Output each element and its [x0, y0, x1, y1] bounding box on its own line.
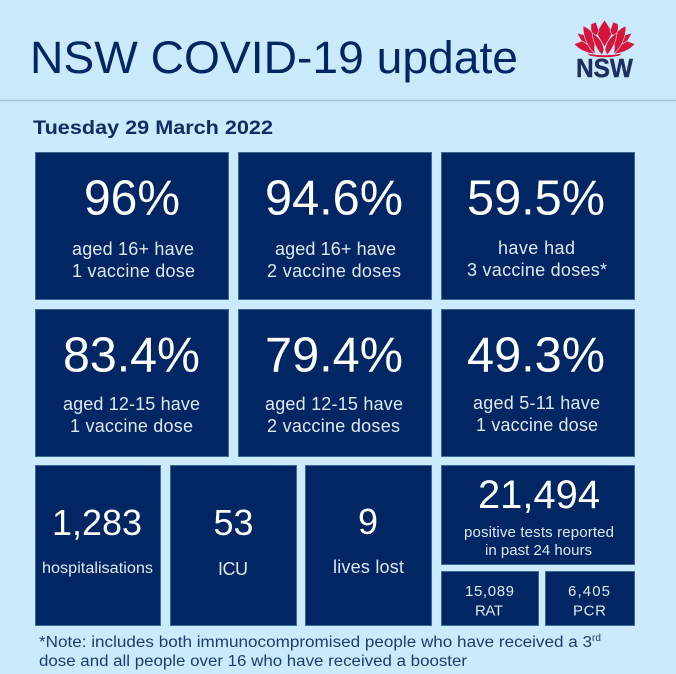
panel: 83.4% aged 12-15 1 dose: [36, 310, 228, 456]
panel: RAT: 15,089: [465, 583, 514, 600]
panel: lives lost: [306, 466, 432, 626]
panel: 49.3% aged 5-11 1 dose: 1 vaccine dose: [476, 415, 598, 435]
title: NSW COVID-19 update: [30, 32, 518, 83]
panel: 49.3% aged 5-11 1 dose: [442, 310, 634, 456]
footnote: [39, 633, 601, 670]
panel: ICU: ICU: [218, 559, 248, 579]
panel: positive tests: in past 24 hours: [485, 542, 592, 559]
panel: hospitalisations: [36, 466, 160, 626]
panel: 94.6% aged 16+ 2 doses: aged 16+ have: [275, 239, 396, 259]
panel: positive tests: [442, 466, 634, 564]
panel: RAT: RAT: [475, 602, 503, 620]
panel: 79.4% aged 12-15 2 doses: 79.4%: [265, 328, 403, 382]
date heading: Tuesday 29 March 2022: [33, 117, 273, 139]
panel: ICU: [170, 466, 296, 626]
panel: 79.4% aged 12-15 2 doses: [238, 310, 432, 456]
panel: hospitalisations: hospitalisations: [42, 560, 153, 577]
panel: 79.4% aged 12-15 2 doses: aged 12-15 have: [265, 394, 403, 414]
icon: NSW waratah logo: [574, 20, 635, 83]
panel: lives lost: lives lost: [333, 557, 404, 577]
panel: 94.6% aged 16+ 2 doses: 94.6%: [265, 172, 403, 226]
panel: 96% aged 16+ 1 dose: 1 vaccine dose: [72, 261, 195, 281]
panel: 96% aged 16+ 1 dose: [36, 152, 228, 300]
panel: positive tests: positive tests reported: [464, 524, 614, 541]
panel: positive tests: 21,494: [478, 473, 600, 517]
panel: 59.5% 3 doses: have had: [498, 238, 575, 258]
panel: 59.5% 3 doses: 3 vaccine doses*: [467, 260, 607, 280]
panel: lives lost: 9: [358, 501, 378, 542]
panel: PCR: PCR: [573, 602, 606, 620]
panel: ICU: 53: [214, 502, 254, 543]
footnote: dose and all people over 16 who have received a booster: [39, 653, 467, 670]
panel: PCR: [546, 572, 634, 626]
panel: 49.3% aged 5-11 1 dose: 49.3%: [467, 328, 605, 382]
footnote: *Note: includes both immunocompromised people who have received a 3: [39, 634, 592, 651]
panel: hospitalisations: 1,283: [52, 502, 142, 543]
panel: 83.4% aged 12-15 1 dose: aged 12-15 have: [63, 394, 200, 414]
panel: 96% aged 16+ 1 dose: 96%: [84, 172, 180, 226]
panel: 59.5% 3 doses: [442, 152, 634, 300]
panel: RAT: [442, 572, 538, 626]
panel: 94.6% aged 16+ 2 doses: 2 vaccine doses: [267, 261, 401, 281]
panel: 79.4% aged 12-15 2 doses: 2 vaccine doses: [267, 416, 400, 436]
NSW wordmark: NSW: [576, 53, 633, 83]
panel: 83.4% aged 12-15 1 dose: 1 vaccine dose: [70, 416, 193, 436]
panel: 49.3% aged 5-11 1 dose: aged 5-11 have: [473, 393, 600, 413]
panel: 83.4% aged 12-15 1 dose: 83.4%: [63, 328, 200, 382]
panel: 94.6% aged 16+ 2 doses: [238, 152, 432, 300]
panel: 96% aged 16+ 1 dose: aged 16+ have: [72, 239, 194, 259]
panel: 59.5% 3 doses: 59.5%: [467, 172, 605, 226]
footnote: rd: [592, 633, 601, 644]
panel: PCR: 6,405: [568, 583, 610, 600]
